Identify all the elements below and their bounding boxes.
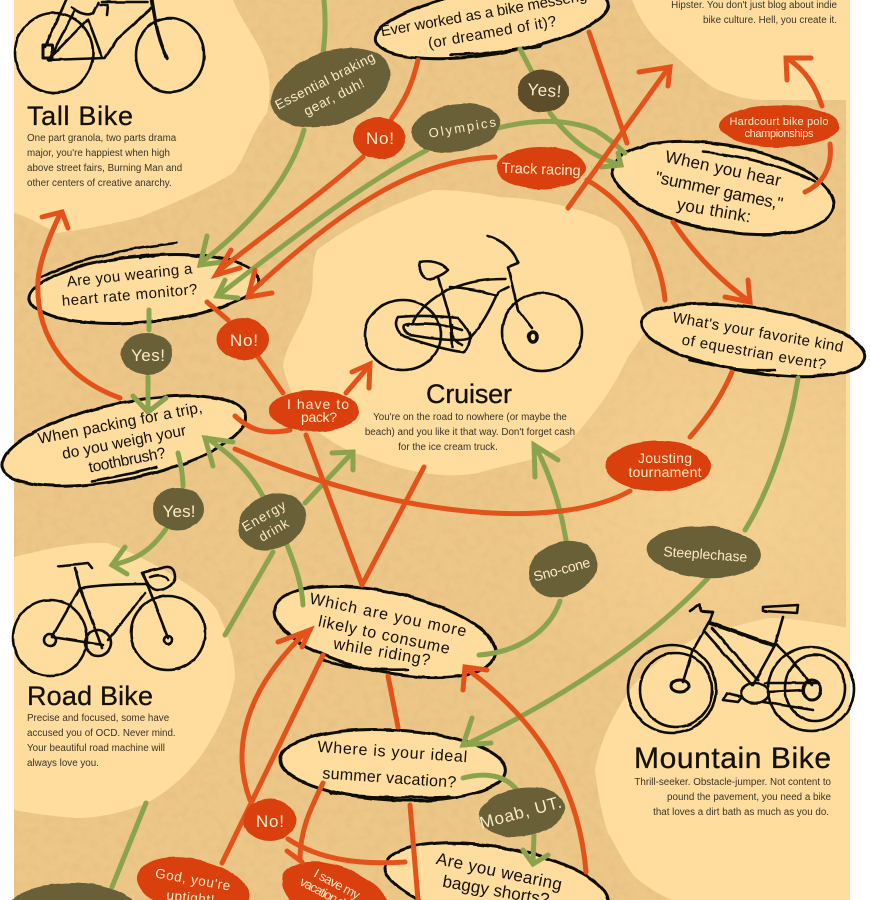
panel: hipster background — [632, 0, 850, 100]
bubble: energy drink — [229, 483, 315, 561]
arrow: track racing to heart rate — [248, 157, 495, 297]
label: I have to pack: pack? — [301, 409, 337, 425]
arrow: yes to toothbrush — [133, 377, 166, 412]
arrow: I have to pack to cruiser — [346, 364, 370, 393]
bubble: steeplechase — [645, 522, 763, 582]
arrow: hardcourt polo to hipster — [786, 58, 822, 106]
label: yes toothbrush: Yes! — [162, 502, 196, 521]
text: tall bike description — [27, 133, 182, 189]
question: heart rate monitor — [27, 243, 261, 332]
arrow: lower left to energy drink — [225, 552, 273, 635]
heading: road bike: Road Bike — [27, 681, 153, 711]
text: hipster description — [671, 0, 838, 26]
label: moab: Moab, UT. — [478, 793, 564, 833]
bubble: I save — [272, 847, 402, 900]
panel: cruiser background — [283, 190, 648, 475]
text: mountain bike description: pound the pavement, you need a bike — [667, 792, 832, 803]
bubble: yes (top) — [517, 70, 569, 112]
bike: tall bike — [15, 0, 204, 93]
question: summer games — [605, 126, 841, 250]
question text: vacation: summer vacation? — [322, 765, 457, 792]
question text: toothbrush — [37, 399, 204, 476]
arrow: to hipster — [568, 67, 670, 208]
text: tall bike description: above street fairs, Burning Man and — [27, 163, 182, 174]
arrow: messenger to no — [392, 60, 418, 118]
arrow: olympics to heart rate — [217, 150, 427, 298]
arrow: braking gear to heart rate — [200, 130, 304, 265]
label: no heart rate: No! — [230, 331, 258, 350]
arrow: yes to road bike — [112, 529, 166, 574]
arrow: summer games to hardcourt polo — [805, 144, 830, 192]
label: no top: No! — [366, 129, 394, 148]
question text: toothbrush: do you weigh your — [61, 422, 188, 463]
arrow: jousting to toothbrush — [235, 449, 630, 514]
bubble: I have to pack — [269, 390, 359, 432]
bubble: track racing — [496, 147, 586, 189]
arrow: uptight to consume — [222, 655, 323, 863]
labels layer — [131, 49, 828, 900]
label: essential braking gear: Essential braking — [273, 49, 377, 113]
text: cruiser description: for the ice cream truck. — [398, 442, 498, 453]
arrow: equestrian to jousting — [690, 372, 732, 437]
text: cruiser description — [365, 412, 575, 453]
label: energy drink: drink — [256, 515, 292, 545]
arrow: track racing to equestrian — [587, 180, 665, 300]
heading: tall bike: Tall Bike — [27, 101, 133, 131]
label: jousting: tournament — [628, 464, 702, 480]
bubble: jousting — [605, 441, 711, 491]
question text: consume: while riding? — [331, 636, 432, 669]
arrow: consume to sno-cone — [479, 601, 560, 655]
question text: summer games: When you hear — [663, 147, 783, 190]
question text: summer games — [654, 147, 785, 226]
label: hardcourt polo: Hardcourt bike polo — [730, 116, 828, 128]
question text: heart rate — [61, 260, 198, 310]
question text: vacation — [317, 739, 468, 792]
arrow: consume to vacation — [388, 676, 398, 727]
bubble: no (heart rate) — [217, 318, 269, 360]
question text: baggy shorts: Are you wearing — [435, 849, 564, 894]
question text: consume — [308, 591, 468, 669]
arrow: no to I have to pack — [258, 357, 283, 393]
bubble: no (vacation) — [244, 799, 296, 841]
arrow: vacation downward — [410, 805, 418, 900]
arrow: energy drink from consume — [287, 545, 303, 605]
question: consume while riding — [266, 569, 504, 695]
bubble: olympics — [408, 98, 504, 158]
text: road bike description: always love you. — [27, 758, 99, 769]
bubble: yes (toothbrush) — [152, 488, 204, 530]
panel: mountain bike background — [595, 618, 850, 900]
question: equestrian — [636, 291, 870, 389]
text: road bike description — [27, 713, 176, 769]
label: no vacation: No! — [256, 812, 284, 831]
arrow: summer games to equestrian — [673, 222, 750, 302]
question text: heart rate: Are you wearing a — [66, 260, 194, 291]
arrow: heart rate to yes — [146, 310, 152, 330]
arrow: toothbrush to yes — [178, 453, 183, 486]
arrow: steeplechase to summer vacation — [463, 578, 708, 745]
arrow: baggy shorts to consume — [463, 667, 586, 872]
arrow: toothbrush to tall bike — [38, 212, 120, 398]
label: energy drink: Energy — [239, 497, 289, 535]
arrow: energy drink to cruiser — [305, 452, 353, 503]
arrow: moab to baggy shorts — [523, 835, 548, 864]
arrow: no to consume — [242, 630, 310, 800]
arrow: olympics to summer games — [498, 122, 625, 153]
arrow: vacation to I save — [287, 783, 323, 862]
label: jousting — [628, 450, 702, 480]
question: baggy shorts — [379, 828, 615, 900]
question text: heart rate: heart rate monitor? — [61, 281, 198, 310]
question: toothbrush — [0, 378, 253, 504]
label: track racing: Track racing — [501, 161, 581, 179]
arrow: yes to summer games — [550, 113, 621, 167]
label: sno-cone: Sno-cone — [532, 554, 592, 584]
text: hipster description: bike culture. Hell, you create it. — [703, 15, 837, 26]
arrow: baggy shorts to no — [288, 839, 405, 863]
text: hipster description: Hipster. You don't just blog about indie — [671, 0, 838, 11]
bubble: sno-cone — [520, 531, 606, 607]
text: tall bike description: other centers of creative anarchy. — [27, 178, 172, 189]
bike: cruiser — [365, 236, 582, 371]
text: mountain bike description: that loves a dirt bath as much as you do. — [653, 807, 829, 818]
label: steeplechase: Steeplechase — [663, 543, 748, 565]
text: road bike description: accused you of OCD. Never mind. — [27, 728, 176, 739]
text: tall bike description: One part granola, two parts drama — [27, 133, 177, 144]
bike: road bike — [13, 563, 205, 676]
bubble: no (top) — [353, 117, 405, 159]
label: uptight: God, you're — [154, 866, 232, 894]
label: olympics: Olympics — [427, 114, 497, 141]
arrow: no to heart rate — [216, 157, 363, 275]
bubble: essential braking gear — [260, 33, 402, 143]
text: cruiser description: beach) and you like it that way. Don't forget cash — [365, 427, 575, 438]
label: hardcourt polo — [730, 116, 828, 140]
arrow: messenger to yes — [520, 49, 532, 72]
arrow: sno-cone to cruiser — [534, 445, 566, 540]
question text: summer games: you think: — [675, 195, 753, 226]
text: cruiser description: You're on the road to nowhere (or maybe the — [373, 412, 567, 423]
arrow: road bike to lower bubble — [112, 803, 146, 887]
panel: road bike background — [14, 543, 235, 818]
question: summer vacation — [278, 724, 508, 806]
bubble: hardcourt polo — [719, 105, 839, 147]
question text: summer games: "summer games," — [654, 168, 785, 213]
question text: equestrian: of equestrian event? — [680, 332, 827, 374]
panel: tall bike background — [14, 0, 270, 233]
heading: cruiser: Cruiser — [426, 379, 512, 409]
question text: equestrian: What's your favorite kind — [671, 309, 844, 356]
text: road bike description: Your beautiful road machine will — [27, 743, 165, 754]
text: road bike description: Precise and focused, some have — [27, 713, 170, 724]
label: hardcourt polo: championships — [744, 128, 814, 140]
label: yes heart rate: Yes! — [131, 346, 165, 365]
heading: mountain bike: Mountain Bike — [634, 742, 831, 775]
label: I have to pack — [287, 396, 349, 425]
arrow: from top to braking gear — [323, 0, 325, 53]
bubble: moab — [476, 782, 568, 842]
question text: consume: Which are you more — [308, 591, 468, 641]
question text: messenger: (or dreamed of it)? — [427, 13, 558, 52]
text: mountain bike description: Thrill-seeker. Obstacle-jumper. Not content to — [634, 777, 832, 788]
arrow: cruiser to consume — [362, 467, 424, 585]
arrow: vacation to moab — [463, 775, 517, 790]
label: essential braking gear: gear, duh! — [301, 75, 367, 119]
arrow: energy drink to toothbrush — [205, 438, 264, 498]
arrow: heart rate to no — [207, 302, 228, 320]
bubble: yes (heart rate) — [121, 333, 173, 375]
label: jousting: Jousting — [638, 450, 692, 466]
arrow: I have to pack to toothbrush — [235, 416, 290, 432]
label: yes top: Yes! — [527, 80, 562, 101]
text: tall bike description: major, you're happiest when high — [27, 148, 170, 159]
text: mountain bike description — [634, 777, 832, 818]
question text: consume: likely to consume — [317, 613, 451, 658]
arrow: messenger to summer games — [589, 32, 627, 143]
arrow: I have to pack to consume — [306, 435, 362, 585]
bubble: bottom left — [6, 883, 138, 900]
bubble: uptight — [131, 848, 255, 900]
question text: toothbrush: When packing for a trip, — [37, 399, 204, 448]
bike: mountain bike — [628, 604, 854, 733]
question: bike messenger — [370, 0, 614, 72]
label: I have to pack: I have to — [287, 396, 349, 412]
arrow: equestrian to steeplechase — [745, 378, 798, 530]
question text: vacation: Where is your ideal — [317, 739, 468, 766]
question text: toothbrush: toothbrush? — [87, 445, 167, 476]
